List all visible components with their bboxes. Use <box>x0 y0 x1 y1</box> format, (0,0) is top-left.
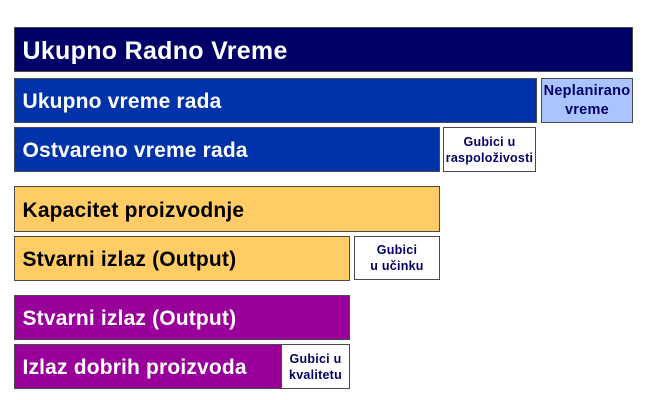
bar: Kapacitet proizvodnje: Kapacitet proizvodnje <box>22 198 244 222</box>
box: Gubici u raspoloživosti: raspoloživosti <box>446 150 533 164</box>
bar: Kapacitet proizvodnje <box>14 186 440 232</box>
box: Gubici u učinku <box>354 236 440 280</box>
bar: Ostvareno vreme rada <box>14 127 440 172</box>
box: Gubici u kvalitetu: kvalitetu <box>289 368 342 382</box>
bar: Stvarni izlaz (Output) purple: Stvarni izlaz (Output) <box>22 307 236 330</box>
box: Neplanirano vreme: Neplanirano <box>544 82 630 98</box>
box: Gubici u učinku: Gubici <box>377 243 417 257</box>
bar: Stvarni izlaz (Output) purple <box>14 295 350 340</box>
box: Gubici u raspoloživosti <box>443 127 536 172</box>
bar: Stvarni izlaz (Output) yellow <box>14 236 350 281</box>
box: Neplanirano vreme: vreme <box>565 102 609 118</box>
bar: Ukupno vreme rada <box>14 78 537 123</box>
bar: Ukupno Radno Vreme: Ukupno Radno Vreme <box>22 36 288 64</box>
bar: Izlaz dobrih proizvoda: Izlaz dobrih proizvoda <box>22 356 247 379</box>
box: Gubici u kvalitetu: Gubici u <box>290 352 342 366</box>
bar: Ukupno Radno Vreme <box>14 27 633 72</box>
box: Gubici u raspoloživosti: Gubici u <box>463 134 515 148</box>
box: Gubici u učinku: u učinku <box>370 259 424 273</box>
bar: Izlaz dobrih proizvoda <box>14 344 282 389</box>
bar: Ostvareno vreme rada: Ostvareno vreme rada <box>22 139 248 162</box>
bar: Ukupno vreme rada: Ukupno vreme rada <box>22 90 221 113</box>
bar: Stvarni izlaz (Output) yellow: Stvarni izlaz (Output) <box>22 248 236 271</box>
box: Neplanirano vreme <box>541 78 633 123</box>
box: Gubici u kvalitetu <box>281 344 350 389</box>
